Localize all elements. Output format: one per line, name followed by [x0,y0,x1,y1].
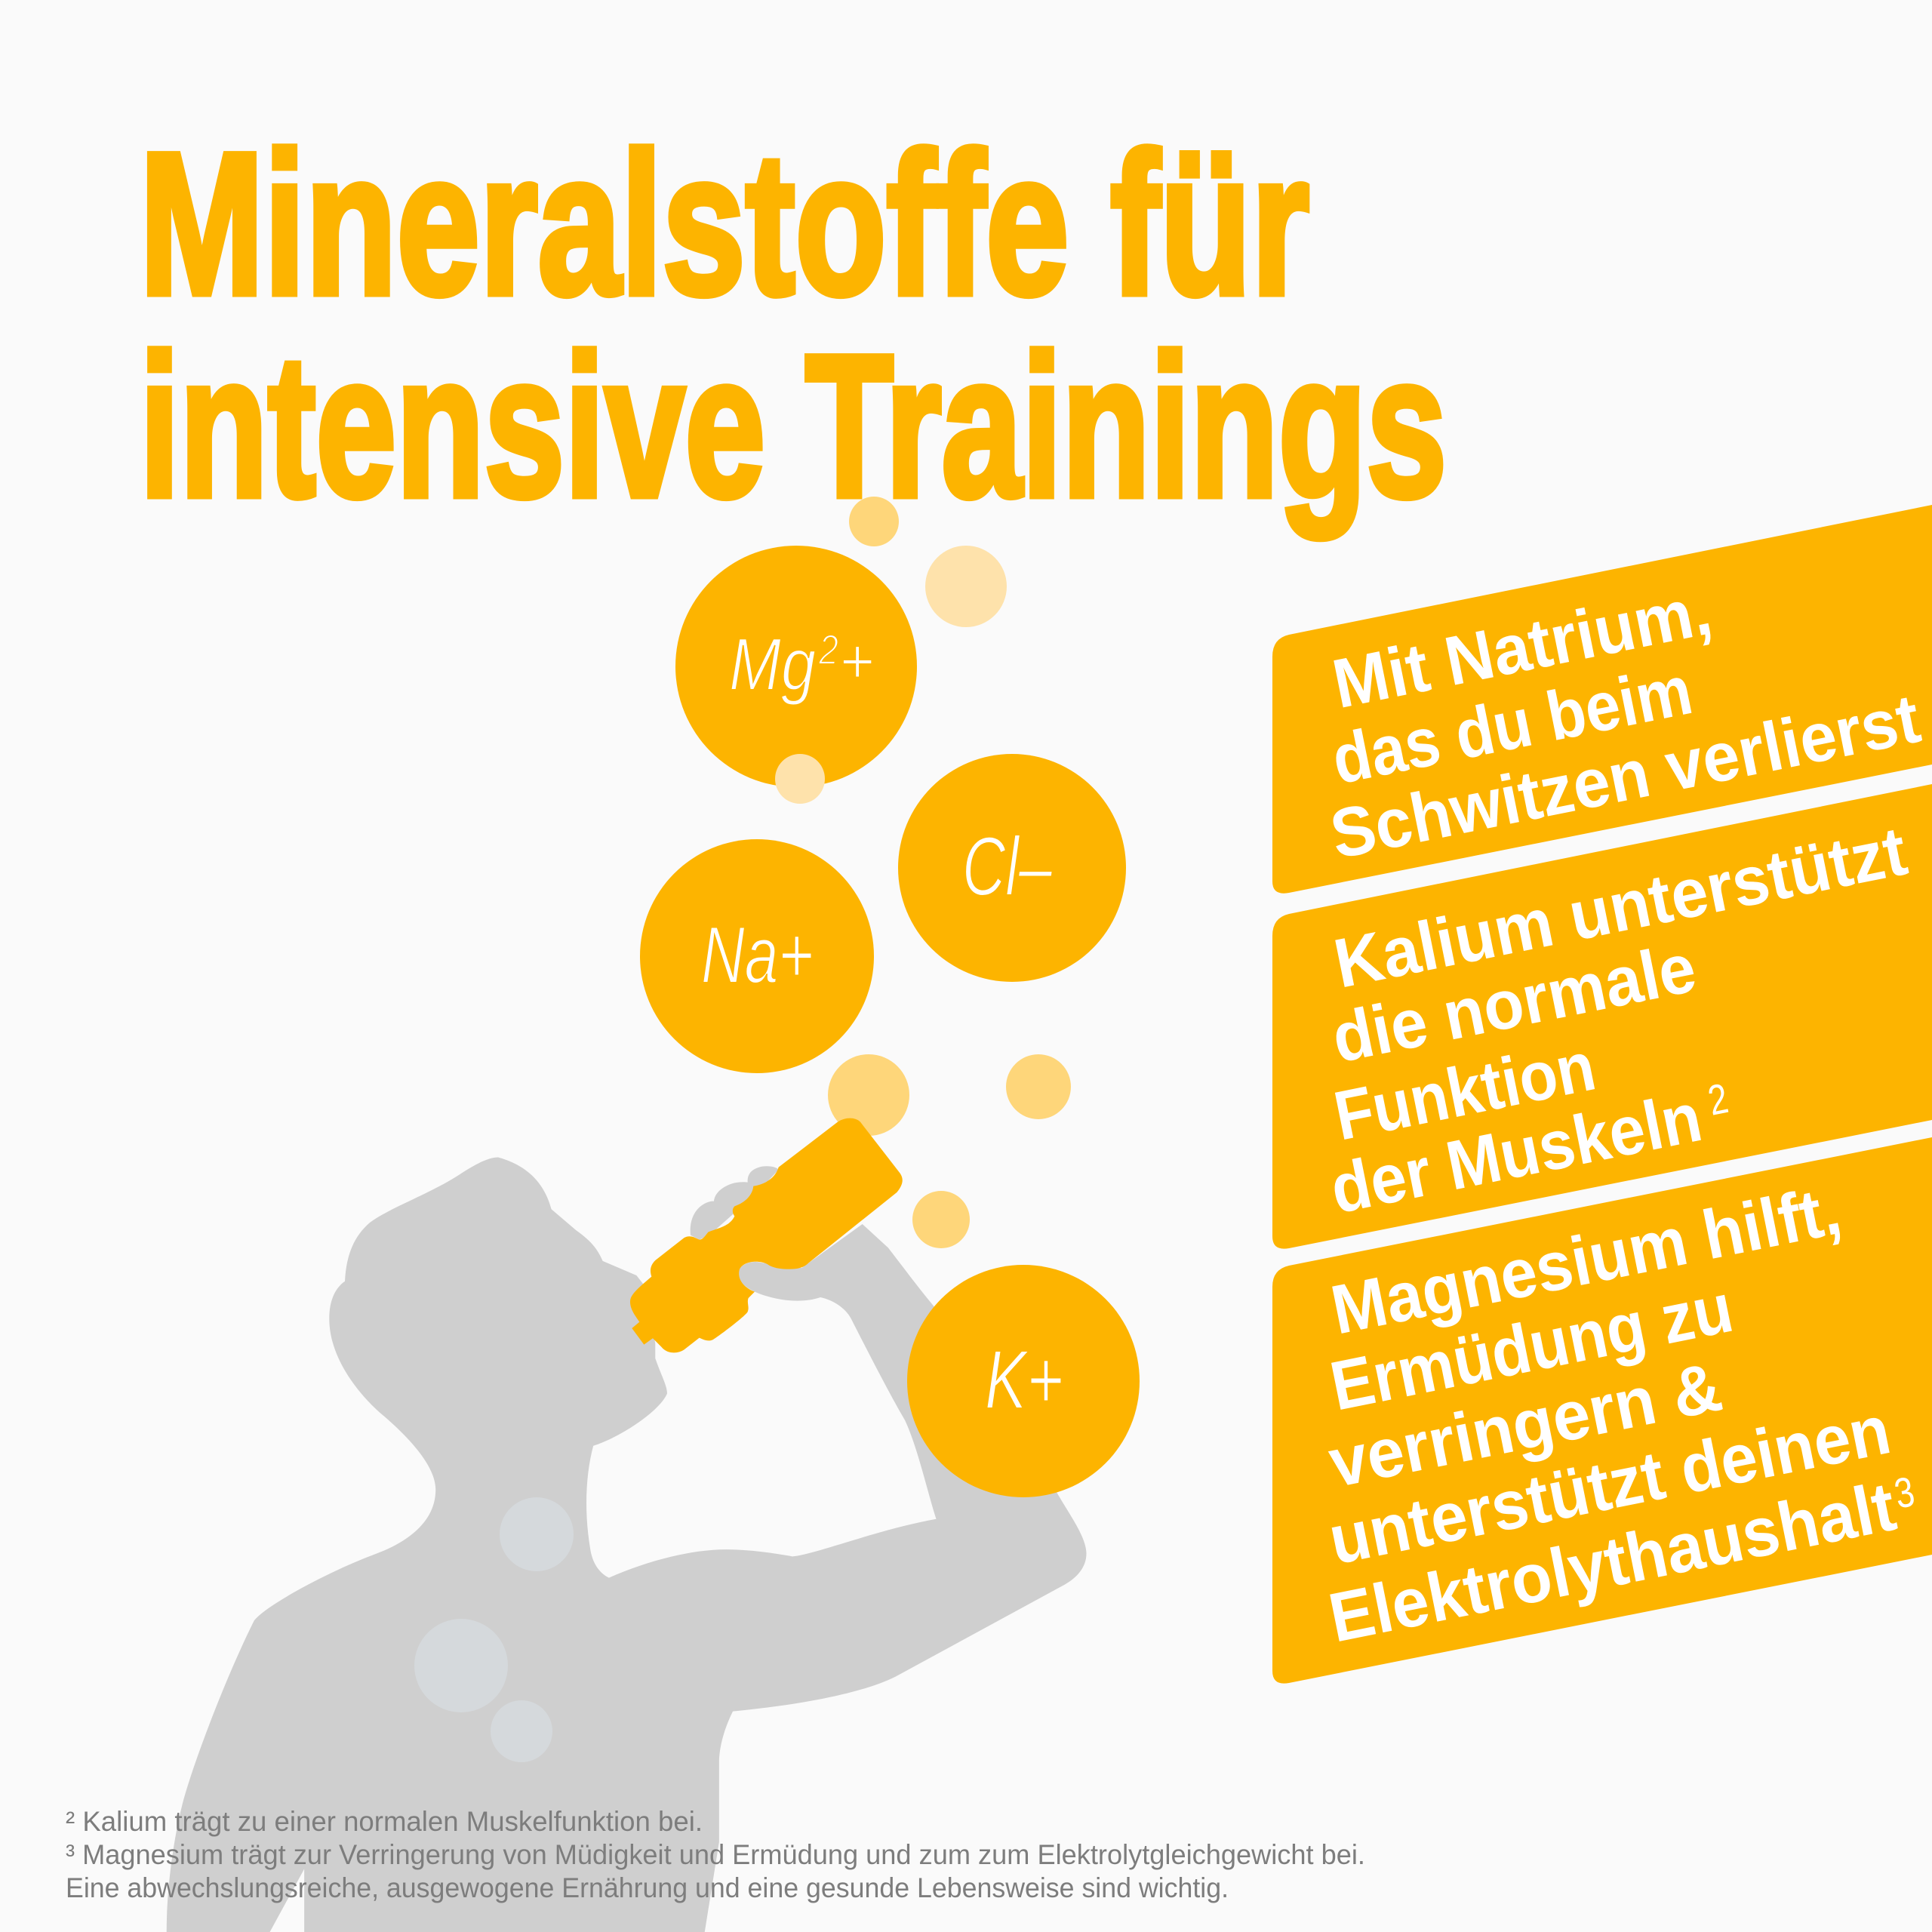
ion circle: sodium: Na+ [701,909,814,1000]
ion circle: sodium [640,839,874,1073]
title [140,110,1447,540]
panel: Natrium: Mit Natrium, [1327,572,1718,723]
footnotes: Eine abwechslungsreiche, ausgewogene Ernährung und eine gesunde Lebensweise sind wichtig. [66,1872,1229,1903]
ion circle: potassium [907,1265,1140,1497]
fingers [691,1166,779,1240]
grey bubbles inside body [414,1497,574,1762]
title: intensive Trainings [140,312,1447,540]
ion circle: chloride: Cl– [962,820,1053,913]
ion circle: magnesium [675,546,917,787]
title: Mineralstoffe für [140,110,1309,337]
panel: Magnesium [1272,1137,1932,1684]
illustration: silhouette of athlete drinking [167,1118,1087,1932]
ion circle: chloride [898,754,1126,982]
panel: Magnesium: verringern & [1323,1348,1728,1503]
panel: Magnesium: Magnesium hilft, [1325,1171,1847,1349]
panel: Natrium: das du beim [1326,651,1698,799]
panel: Natrium [1272,505,1932,894]
panel: Magnesium: 3 [1890,1467,1918,1518]
bottle [630,1118,903,1352]
ion circle: magnesium: + [839,626,874,697]
panel: Magnesium: unterstützt deinen [1323,1391,1897,1580]
panel: Kalium: 2 [1704,1074,1732,1124]
panel: Kalium: Kalium unterstützt [1328,812,1913,1003]
panel: Magnesium: Ermüdung zu [1324,1269,1739,1426]
panel: Magnesium: Elektrolythaushalt [1323,1468,1902,1657]
panel: Kalium: Funktion [1328,1028,1601,1155]
panel: Kalium: der Muskeln [1324,1078,1708,1229]
bubble over magnesium circle [775,754,825,804]
footnotes: ³ Magnesium trägt zur Verringerung von Müdigkeit und Ermüdung und zum zum Elektrolytgleichgewicht bei. [66,1839,1365,1870]
figure body [167,1158,1087,1932]
ion circle: magnesium: Mg [729,623,816,706]
panel: Kalium [1272,784,1932,1249]
panel: Kalium: die normale [1326,929,1702,1078]
ion circle: potassium: K+ [985,1334,1063,1426]
small bubbles [828,497,1071,1248]
ion circle: magnesium: 2 [818,626,838,673]
footnotes: ² Kalium trägt zu einer normalen Muskelfunktion bei. [66,1806,703,1837]
footnotes [66,1806,1365,1903]
